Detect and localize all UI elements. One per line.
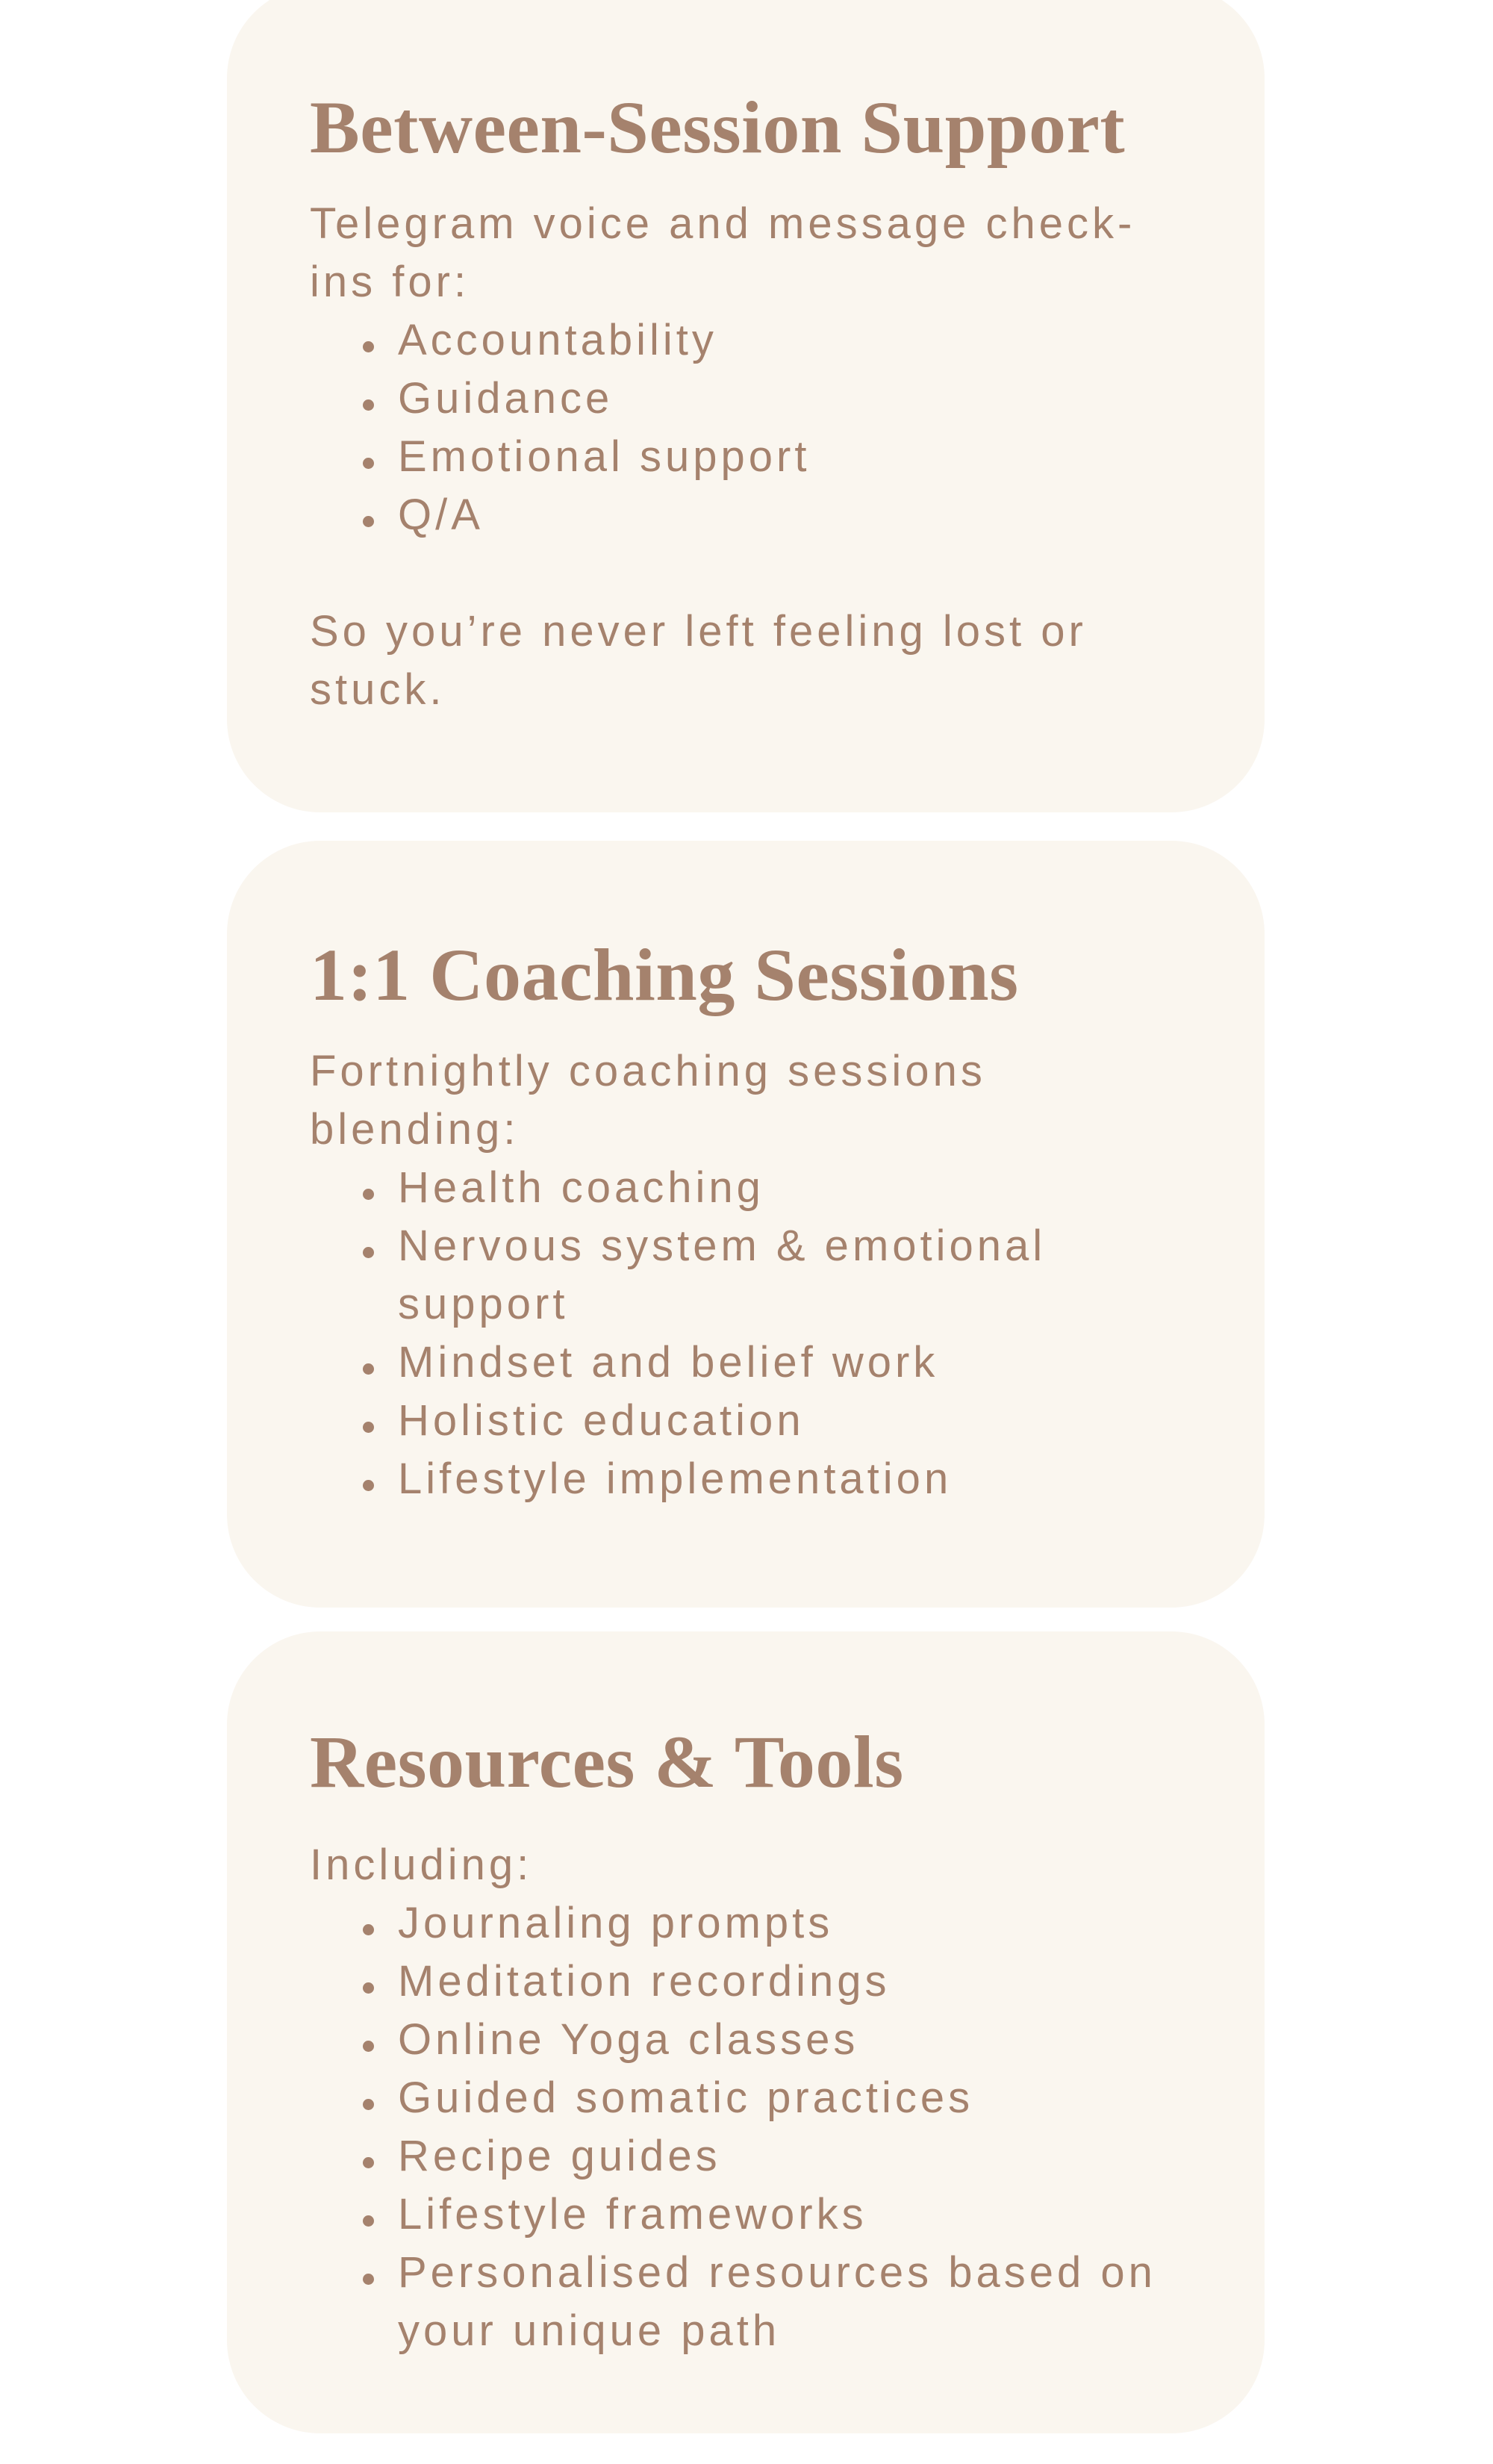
text block: coaching sessions list: Health coaching	[398, 1163, 764, 1212]
text block: resources list: Journaling prompts	[398, 1899, 833, 1947]
text block: coaching sessions list: Nervous system & emotional	[398, 1222, 1046, 1270]
text block: resources list: Lifestyle frameworks	[398, 2190, 867, 2239]
text block: telegram check-ins: Q/A	[398, 491, 484, 539]
text block: coaching sessions list: Lifestyle implementation	[398, 1455, 952, 1503]
text block: telegram check-ins: Accountability	[398, 316, 717, 364]
text block: coaching sessions list: support	[398, 1280, 568, 1328]
text block: coaching sessions list: Holistic education	[398, 1396, 805, 1445]
text block: coaching sessions list	[310, 1047, 1046, 1503]
text block: telegram check-ins: ins for:	[310, 258, 470, 306]
panel: resources & tools	[227, 1631, 1265, 2433]
text block: coaching sessions list: Fortnightly coaching sessions	[310, 1047, 986, 1095]
text block: coaching sessions list: Mindset and belief work	[398, 1338, 938, 1387]
heading: resources & tools: Resources & Tools	[310, 1720, 904, 1803]
text block: telegram check-ins	[310, 199, 1135, 714]
text block: telegram check-ins: Telegram voice and message check-	[310, 199, 1135, 248]
text block: resources list: Guided somatic practices	[398, 2073, 973, 2122]
text block: resources list: Including:	[310, 1841, 532, 1889]
panel: 1:1 coaching sessions	[227, 841, 1265, 1608]
heading: between-session support: Between-Session Support	[310, 86, 1125, 169]
text block: resources list: Recipe guides	[398, 2132, 721, 2180]
text block: resources list: your unique path	[398, 2306, 780, 2355]
text block: resources list: Online Yoga classes	[398, 2015, 858, 2064]
panel: between-session support	[227, 0, 1265, 812]
text block: coaching sessions list: blending:	[310, 1105, 519, 1154]
text block: telegram check-ins: Guidance	[398, 374, 613, 423]
text block: telegram check-ins: Emotional support	[398, 432, 810, 481]
text block: telegram check-ins: So you’re never left feeling lost or	[310, 607, 1087, 656]
heading: 1:1 coaching sessions: 1:1 Coaching Sessions	[310, 933, 1019, 1016]
text block: resources list: Personalised resources based on	[398, 2248, 1156, 2297]
text block: resources list: Meditation recordings	[398, 1957, 891, 2006]
text block: telegram check-ins: stuck.	[310, 665, 445, 714]
text block: resources list	[310, 1841, 1156, 2355]
